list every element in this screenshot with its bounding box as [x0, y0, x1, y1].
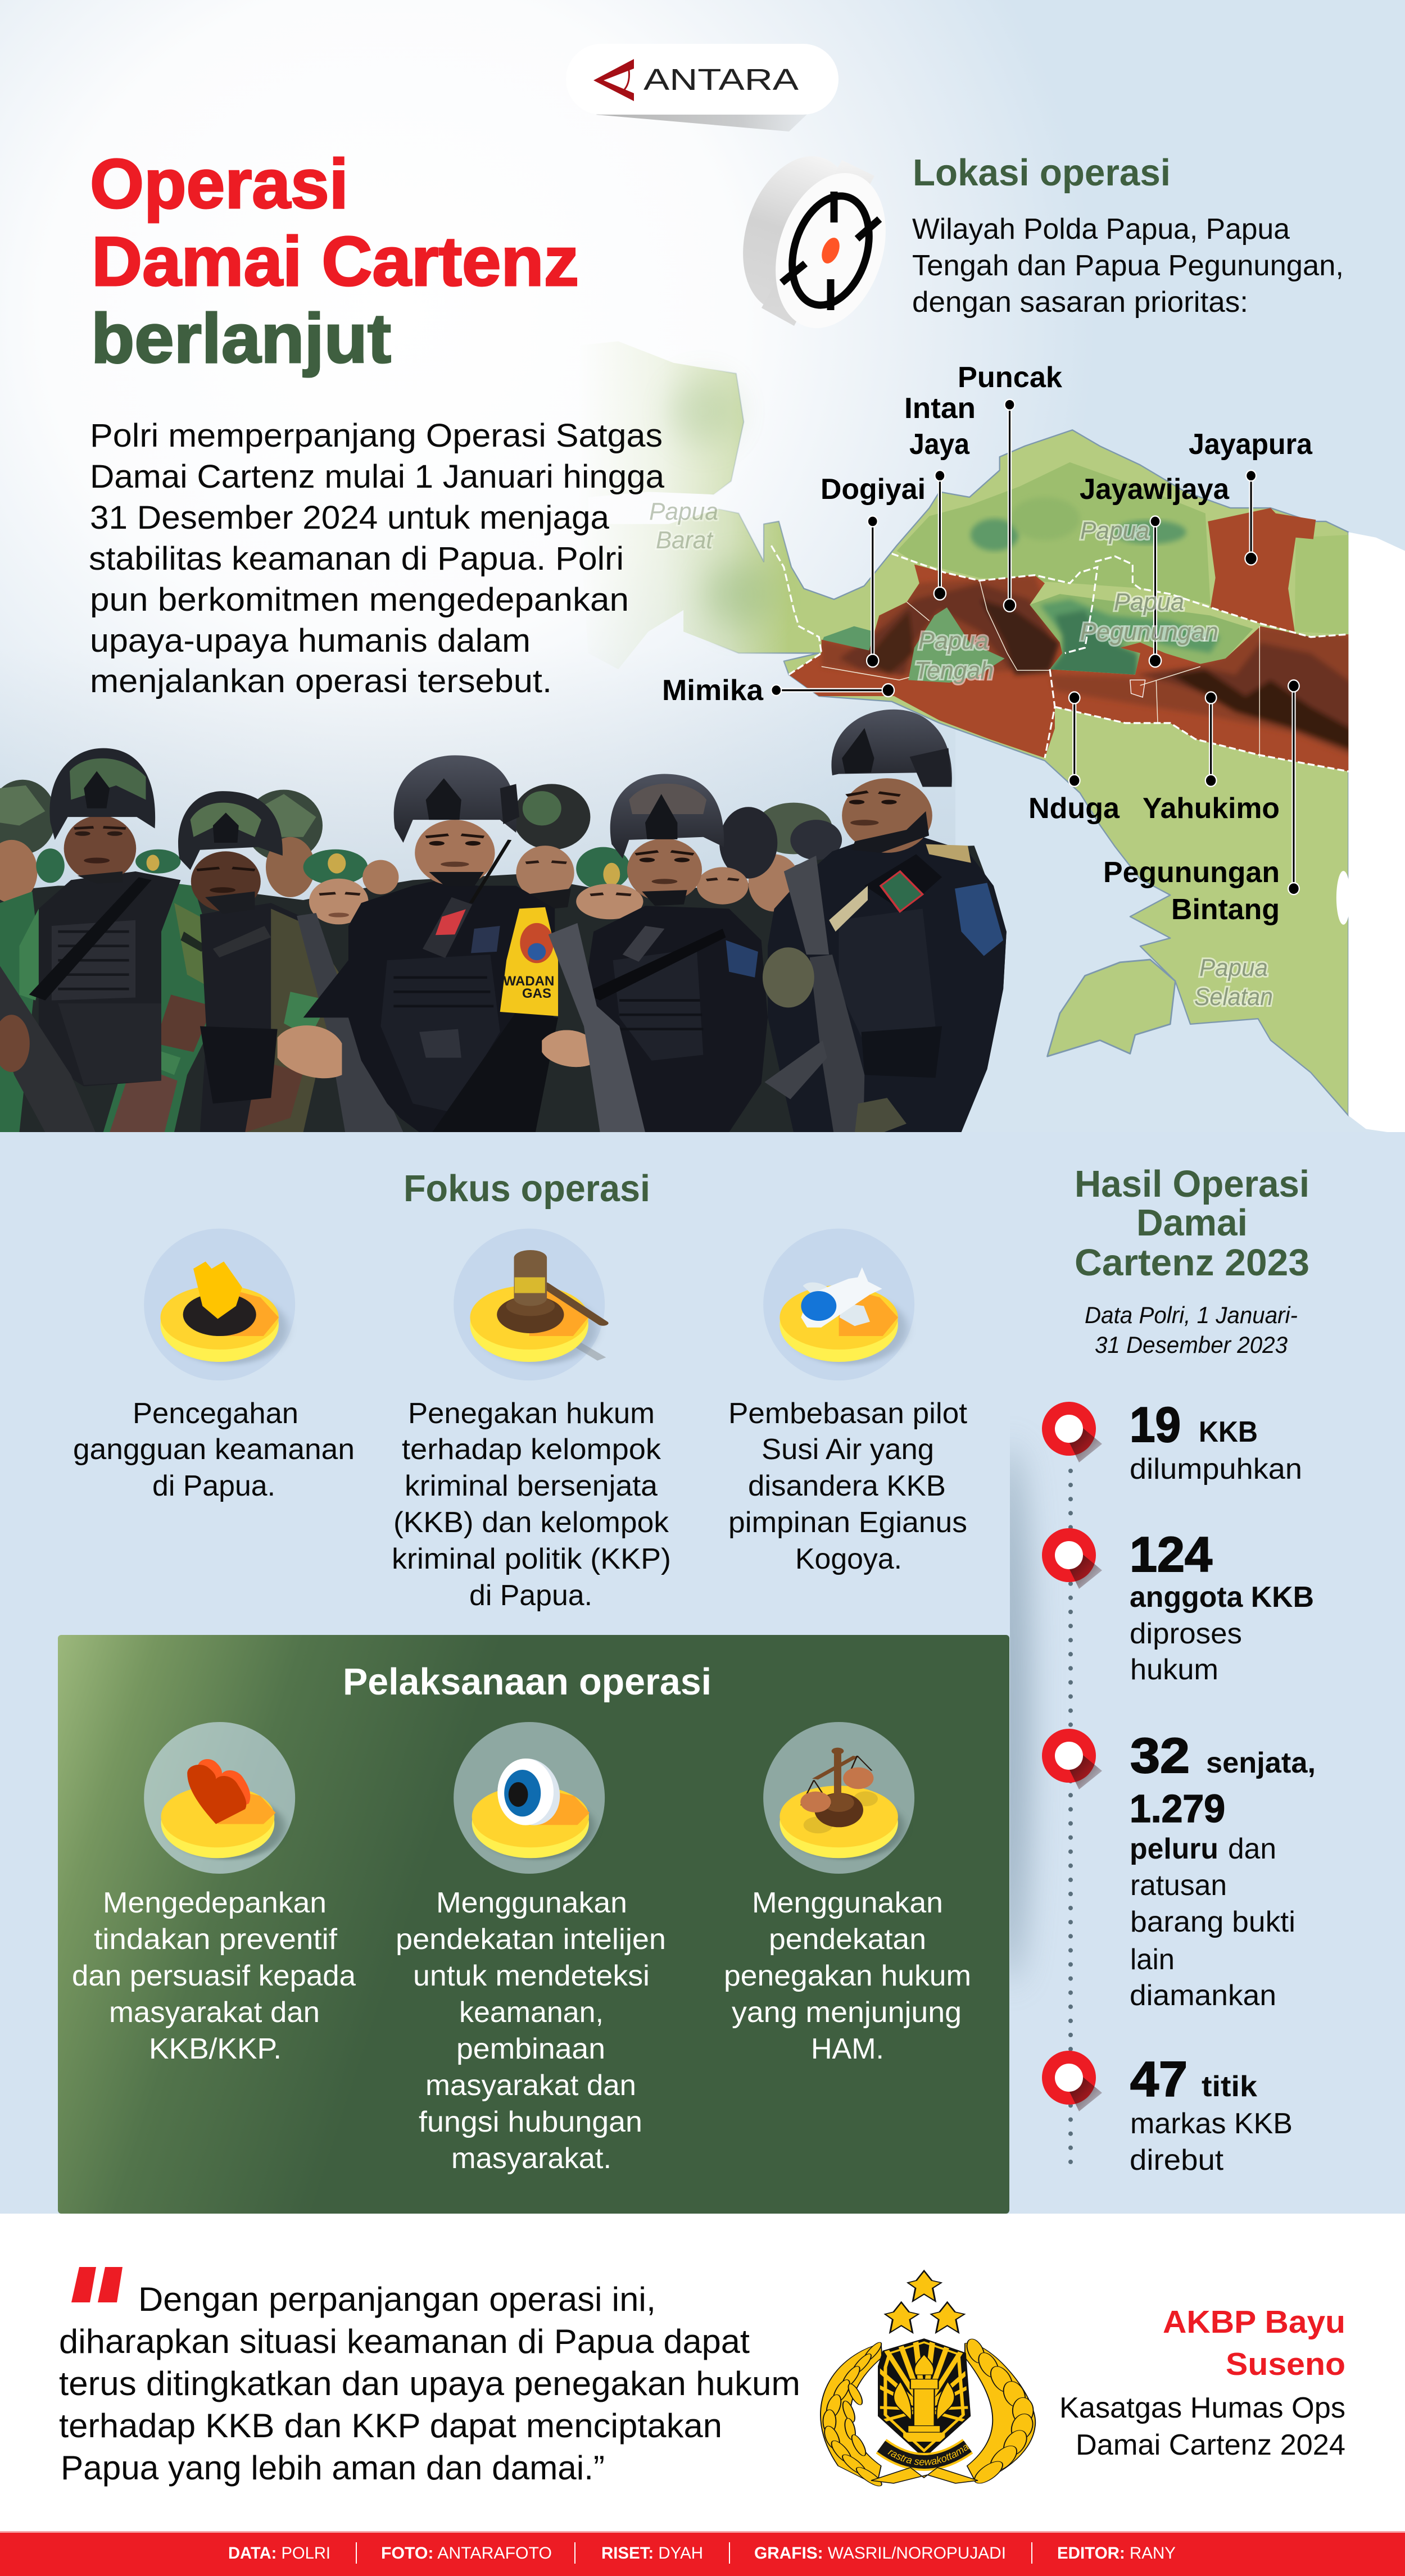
map labels: priority regencies: Dogiyai [821, 473, 926, 506]
province labels: Tengah [914, 657, 994, 684]
pelaksanaan text: column 2: Menggunakan [436, 1887, 627, 1919]
map labels: priority regencies: Jaya [909, 428, 970, 461]
intro paragraph: pun berkomitmen mengedepankan [90, 581, 629, 618]
icon: plane [763, 1229, 914, 1380]
stat 2: 124 anggota KKB diproses hukum: anggota KKB [1130, 1581, 1314, 1614]
stat 1: 19 KKB dilumpuhkan: 19 [1130, 1397, 1181, 1452]
stat 2: 124 anggota KKB diproses hukum [1130, 1526, 1314, 1686]
speaker title [1059, 2392, 1345, 2461]
pelaksanaan text: column 1: Mengedepankan [103, 1887, 327, 1919]
soldier: left, camouflage [19, 748, 216, 1132]
stat 1: 19 KKB dilumpuhkan: KKB [1199, 1416, 1258, 1448]
intro paragraph: menjalankan operasi tersebut. [90, 663, 552, 699]
stat 3: 32 senjata, 1.279 peluru: 32 [1130, 1728, 1190, 1783]
province labels: Papua [649, 498, 718, 525]
map: Papua provinces [568, 341, 1405, 1137]
map labels: priority regencies: Jayapura [1189, 428, 1313, 461]
pelaksanaan text: column 1: tindakan preventif [94, 1923, 338, 1956]
logo: ANTARA pill [566, 44, 839, 131]
fokus text: column 1 [73, 1397, 355, 1502]
intro paragraph [89, 417, 665, 699]
marker: stat 1 [1042, 1402, 1102, 1462]
icon: eye [454, 1722, 605, 1874]
map labels: priority regencies: Mimika [662, 674, 764, 707]
pelaksanaan text: column 2: untuk mendeteksi [413, 1960, 650, 1992]
timeline dots [1068, 1471, 1073, 2174]
intro paragraph: Polri memperpanjang Operasi Satgas [90, 417, 663, 454]
province labels: Selatan [1194, 983, 1273, 1011]
speaker name: Suseno [1226, 2346, 1345, 2382]
photo: police and soldiers in formation [0, 710, 1007, 1132]
title [90, 146, 579, 378]
stat 4: 47 titik markas KKB direbut: 47 [1130, 2051, 1188, 2107]
stat 3: 32 senjata, 1.279 peluru: senjata, [1206, 1747, 1316, 1779]
province labels: Barat [656, 526, 714, 554]
heading: Lokasi operasi: Lokasi operasi [913, 152, 1171, 194]
pelaksanaan text: column 1: masyarakat dan [109, 1996, 320, 2029]
stat 1: 19 KKB dilumpuhkan: dilumpuhkan [1130, 1453, 1302, 1485]
Papua Pegunungan highland patch [1030, 594, 1253, 697]
location description: Tengah dan Papua Pegunungan, [912, 249, 1344, 282]
province labels: Papua [918, 627, 989, 655]
marker: stat 2 [1042, 1528, 1102, 1589]
footer credits: DATA: POLRI [228, 2544, 330, 2563]
speaker name [1163, 2304, 1345, 2382]
pelaksanaan text: column 3: Menggunakan [752, 1887, 943, 1919]
stars [885, 2271, 964, 2333]
map labels: priority regencies: Nduga [1028, 792, 1120, 825]
pelaksanaan text: column 2: masyarakat dan [425, 2069, 636, 2102]
pelaksanaan text: column 2: pendekatan intelijen [396, 1923, 666, 1956]
armband [500, 907, 558, 1016]
leader lines [771, 399, 1299, 894]
armband text: GAS [522, 986, 551, 1001]
stat 2: 124 anggota KKB diproses hukum: 124 [1130, 1526, 1212, 1582]
Papua Tengah highland patch [908, 607, 1005, 683]
stat 2: 124 anggota KKB diproses hukum: diproses [1130, 1618, 1242, 1650]
pelaksanaan icons [144, 1722, 914, 1874]
icon: target disc [724, 142, 904, 342]
heading: Hasil Operasi Damai Cartenz 2023 [1075, 1163, 1309, 1284]
stat 3: 32 senjata, 1.279 peluru: dan [1228, 1833, 1276, 1865]
quote text [59, 2280, 800, 2487]
soldier: second left, camouflage [178, 791, 342, 1132]
heading: Pelaksanaan operasi: Pelaksanaan operasi [343, 1661, 711, 1703]
pelaksanaan text: column 2: keamanan, [459, 1996, 604, 2029]
police officer: second right [542, 774, 768, 1132]
location description: Wilayah Polda Papua, Papua [912, 213, 1290, 246]
stat 3: 32 senjata, 1.279 peluru: 1.279 [1130, 1787, 1225, 1830]
map labels: priority regencies: Jayawijaya [1080, 473, 1230, 506]
map labels: priority regencies: Bintang [1171, 893, 1280, 926]
police officer: right [763, 710, 1007, 1132]
terrain: northern and western relief [668, 379, 1348, 651]
fokus text: column 1: gangguan keamanan [73, 1433, 355, 1466]
fokus text: column 3: pimpinan Egianus [728, 1506, 967, 1539]
title: Damai Cartenz [92, 223, 579, 301]
quote text: Papua yang lebih aman dan damai.” [61, 2449, 605, 2487]
priority regency area [789, 508, 1356, 771]
pelaksanaan text: column 2 [396, 1887, 666, 2175]
marker: stat 4 [1042, 2051, 1102, 2111]
heading: Fokus operasi: Fokus operasi [404, 1167, 650, 1210]
map labels: priority regencies: Pegunungan [1103, 856, 1280, 889]
stat 3: 32 senjata, 1.279 peluru: ratusan [1130, 1869, 1227, 1902]
neighbouring territory [1348, 532, 1405, 1137]
left wreath [821, 2342, 886, 2488]
location description: dengan sasaran prioritas: [912, 286, 1248, 319]
ribbon: rastra sewakottama [887, 2445, 969, 2465]
pelaksanaan text: column 2: pembinaan [456, 2033, 605, 2065]
stat 4: 47 titik markas KKB direbut: direbut [1130, 2144, 1224, 2177]
panel: pelaksanaan operasi [58, 1635, 1009, 2214]
icon: scales of justice [763, 1722, 914, 1874]
map labels: priority regencies [662, 361, 1313, 926]
pelaksanaan text: column 3: penegakan hukum [724, 1960, 971, 1992]
province labels [649, 498, 1273, 1011]
province labels: Papua [1114, 588, 1184, 616]
fokus text: column 3: disandera KKB [748, 1470, 946, 1502]
province labels: Papua [1080, 517, 1149, 544]
stat 4: 47 titik markas KKB direbut: titik [1202, 2070, 1257, 2103]
stat 3: 32 senjata, 1.279 peluru [1130, 1728, 1316, 2012]
pelaksanaan text: column 1 [72, 1887, 356, 2065]
quote text: Dengan perpanjangan operasi ini, [138, 2280, 656, 2318]
stat 3: 32 senjata, 1.279 peluru: diamankan [1130, 1979, 1276, 2012]
ribbon [871, 2439, 978, 2484]
icon: flame [144, 1229, 295, 1380]
fokus text: column 2: kriminal politik (KKP) [392, 1543, 671, 1575]
fokus text: column 2: di Papua. [469, 1579, 592, 1612]
icon: gavel [454, 1229, 605, 1380]
emblem: Polri crest [820, 2270, 1036, 2487]
heading: Hasil Operasi Damai Cartenz 2023: Hasil Operasi [1075, 1163, 1309, 1205]
title: Operasi [90, 146, 348, 223]
right wreath [964, 2338, 1035, 2486]
data source note [1085, 1302, 1298, 1358]
data source note: Data Polri, 1 Januari- [1085, 1302, 1298, 1328]
map labels: priority regencies: Yahukimo [1143, 792, 1280, 825]
stat 4: 47 titik markas KKB direbut: markas KKB [1130, 2107, 1293, 2140]
armband text: WADAN [504, 974, 554, 989]
title: berlanjut [91, 300, 391, 378]
data source note: 31 Desember 2023 [1095, 1332, 1288, 1358]
fokus text: column 2: (KKB) dan kelompok [393, 1506, 669, 1539]
fokus text: column 3 [728, 1397, 968, 1575]
province labels: Papua [1199, 954, 1268, 982]
quote text: terus ditingkatkan dan upaya penegakan hukum [59, 2365, 800, 2402]
armband text [504, 974, 554, 1001]
pelaksanaan text: column 2: fungsi hubungan [419, 2106, 642, 2138]
province borders [771, 546, 1348, 771]
land: main island [568, 341, 1348, 1116]
stat 3: 32 senjata, 1.279 peluru: peluru [1130, 1833, 1218, 1865]
footer credits [0, 2531, 1405, 2576]
radio [423, 897, 472, 958]
icon: quotation mark [71, 2267, 123, 2302]
speaker title: Damai Cartenz 2024 [1076, 2429, 1345, 2461]
quote text: terhadap KKB dan KKP dapat menciptakan [59, 2407, 722, 2445]
map labels: priority regencies: Intan [904, 392, 976, 425]
icon: heart [144, 1722, 295, 1874]
land: Dolak island [1048, 960, 1175, 1056]
footer credits: EDITOR: RANY [1057, 2544, 1176, 2563]
fokus text: column 3: Susi Air yang [762, 1433, 934, 1466]
pelaksanaan text: column 3: yang menjunjung [732, 1996, 962, 2029]
intro paragraph: 31 Desember 2024 untuk menjaga [90, 499, 610, 536]
stat 1: 19 KKB dilumpuhkan [1130, 1397, 1302, 1485]
pelaksanaan text: column 3: pendekatan [769, 1923, 926, 1956]
shield [877, 2338, 971, 2459]
rifle: left [0, 966, 96, 1132]
fokus text: column 1: di Papua. [152, 1470, 275, 1502]
panel: quote band [0, 2214, 1405, 2531]
fokus text: column 1: Pencegahan [133, 1397, 298, 1430]
fokus text: column 2: kriminal bersenjata [405, 1470, 658, 1502]
footer credits: RISET: DYAH [601, 2544, 703, 2563]
pelaksanaan text: column 1: dan persuasif kepada [72, 1960, 356, 1992]
fokus text: column 2: terhadap kelompok [402, 1433, 661, 1466]
fokus text: column 3: Kogoya. [795, 1543, 902, 1575]
pelaksanaan text: column 2: masyarakat. [451, 2142, 611, 2175]
map labels: priority regencies: Puncak [958, 361, 1062, 394]
fokus text: column 2 [392, 1397, 671, 1612]
pelaksanaan text: column 3: HAM. [811, 2033, 884, 2065]
speaker title: Kasatgas Humas Ops [1059, 2392, 1345, 2424]
fokus text: column 2: Penegakan hukum [408, 1397, 655, 1430]
intro paragraph: Damai Cartenz mulai 1 Januari hingga [90, 458, 665, 495]
quote text: diharapkan situasi keamanan di Papua dapat [59, 2323, 750, 2360]
province labels: Pegunungan [1080, 618, 1218, 646]
intro paragraph: stabilitas keamanan di Papua. Polri [89, 540, 624, 577]
logo wordmark: ANTARA [643, 63, 799, 97]
background [0, 0, 1046, 1982]
police officer: centre [278, 755, 597, 1132]
crowd backfill [0, 846, 1007, 1132]
panel: fokus operasi icons [144, 1229, 914, 1380]
pelaksanaan text: column 3 [724, 1887, 971, 2065]
footer credits: FOTO: ANTARAFOTO [381, 2544, 552, 2563]
heading: Hasil Operasi Damai Cartenz 2023: Cartenz 2023 [1075, 1242, 1309, 1284]
footer credits: GRAFIS: WASRIL/NOROPUJADI [754, 2544, 1006, 2563]
stat 3: 32 senjata, 1.279 peluru: barang bukti [1130, 1906, 1295, 1938]
speaker name: AKBP Bayu [1163, 2304, 1345, 2340]
stat 2: 124 anggota KKB diproses hukum: hukum [1130, 1653, 1218, 1686]
logo mark [593, 59, 634, 101]
intro paragraph: upaya-upaya humanis dalam [90, 623, 531, 659]
pelaksanaan text: column 1: KKB/KKP. [149, 2033, 282, 2065]
regency borders [822, 580, 1259, 758]
stat 4: 47 titik markas KKB direbut [1130, 2051, 1293, 2177]
fokus text: column 3: Pembebasan pilot [728, 1397, 968, 1430]
stat 3: 32 senjata, 1.279 peluru: lain [1130, 1943, 1175, 1976]
back row [0, 780, 842, 1132]
heading: Hasil Operasi Damai Cartenz 2023: Damai [1136, 1202, 1248, 1244]
location description [912, 213, 1344, 319]
rifle: centre left [297, 913, 404, 1132]
marker: stat 3 [1042, 1729, 1102, 1789]
